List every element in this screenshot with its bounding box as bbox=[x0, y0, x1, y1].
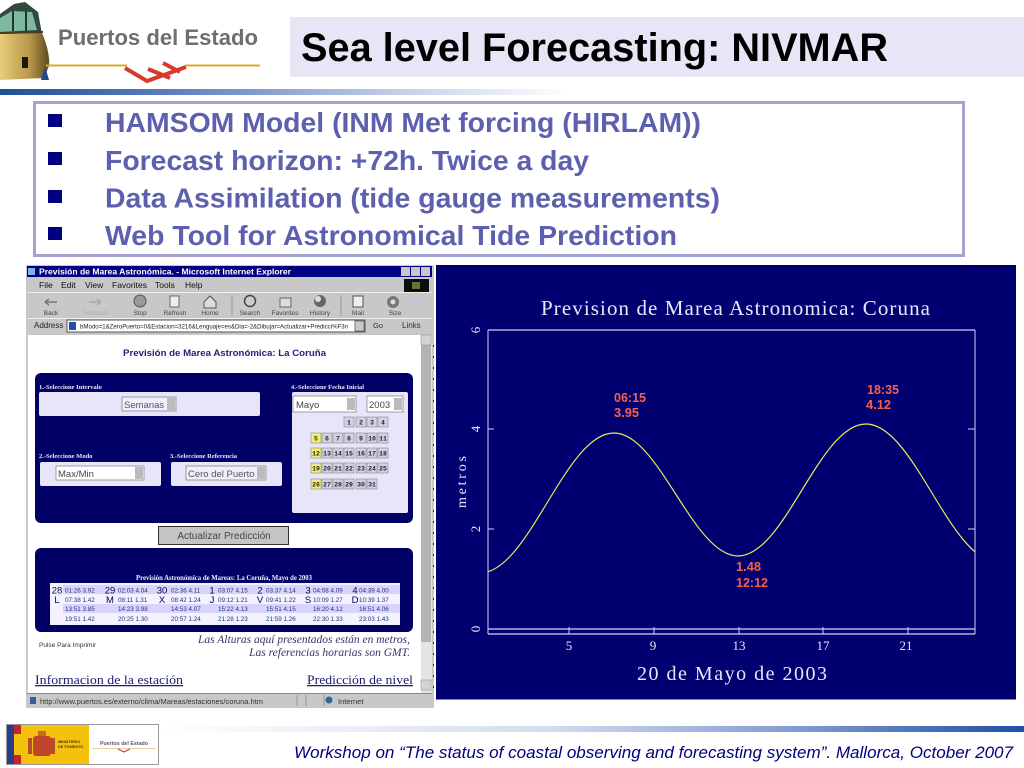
icon: coat of arms bbox=[28, 731, 55, 756]
page area bbox=[28, 335, 421, 693]
table body: 15:51 4.15 bbox=[266, 606, 296, 613]
step 4 calendar: 14 bbox=[334, 450, 342, 458]
menu bar: File bbox=[39, 280, 53, 290]
step 4 calendar: 16 bbox=[357, 450, 365, 458]
y axis labels: 4 bbox=[468, 425, 483, 432]
calendar cells bbox=[311, 417, 388, 489]
links: Informacion de la estación bbox=[35, 673, 184, 687]
icon: red zigzag bbox=[125, 63, 186, 81]
step 4 calendar: 31 bbox=[368, 482, 376, 488]
table body: 01:26 3.92 bbox=[65, 588, 95, 594]
annotation: low tide: 1.48 bbox=[736, 559, 761, 574]
step 4 calendar: Mayo bbox=[296, 400, 319, 411]
annotation: second high tide: 18:35 bbox=[867, 382, 899, 397]
table body: 21:59 1.26 bbox=[266, 616, 296, 623]
annotation: first high tide bbox=[614, 390, 646, 420]
table body: 2 bbox=[257, 586, 263, 596]
table body: 16:51 4.06 bbox=[359, 606, 389, 613]
small wordmark: Puertos del Estado bbox=[100, 741, 149, 747]
form panel bbox=[35, 373, 413, 523]
links bbox=[35, 673, 414, 687]
header gradient rule bbox=[0, 89, 570, 95]
table body: S bbox=[305, 595, 311, 606]
table body: 20:57 1.24 bbox=[171, 616, 201, 623]
title: Sea level Forecasting: NIVMAR bbox=[301, 26, 888, 70]
step 4 calendar: 29 bbox=[345, 482, 353, 488]
bullet 3: Data Assimilation (tide gauge measurements) bbox=[105, 182, 720, 214]
y axis labels: 6 bbox=[468, 326, 483, 333]
toolbar: Mail bbox=[352, 310, 365, 317]
panel: browser screenshot bbox=[26, 265, 434, 708]
table body: 08:11 1.31 bbox=[118, 597, 148, 604]
step 4 calendar: 28 bbox=[334, 482, 342, 488]
step 4 calendar: 23 bbox=[357, 466, 365, 472]
footer gradient rule bbox=[160, 726, 1024, 732]
logo rule bbox=[46, 64, 260, 66]
step 1 bbox=[39, 384, 260, 416]
table body: 3 bbox=[305, 586, 311, 596]
tide curve bbox=[480, 424, 998, 573]
table body: V bbox=[257, 595, 264, 606]
step 4 calendar: 4.-Seleccione Fecha Inicial bbox=[291, 384, 364, 391]
toolbar: Forward bbox=[83, 310, 107, 317]
table body: 30 bbox=[157, 586, 167, 596]
table heading: Previsión Astronómica de Mareas: La Coruña, Mayo de 2003 bbox=[136, 574, 312, 582]
x axis labels: 9 bbox=[650, 638, 656, 653]
toolbar icons bbox=[45, 295, 399, 308]
table body: 20:25 1.30 bbox=[118, 616, 148, 623]
table body: 09:12 1.21 bbox=[218, 597, 248, 604]
icon: lighthouse bbox=[0, 2, 49, 80]
small red mark bbox=[118, 749, 130, 752]
step 3: 3.-Seleccione Referencia bbox=[170, 453, 238, 460]
browser title bar bbox=[27, 266, 432, 277]
step 4 calendar: 3 bbox=[370, 420, 374, 426]
step 4 calendar bbox=[291, 384, 408, 513]
status bar: http://www.puertos.es/externo/clima/Mareas/estaciones/coruna.htm bbox=[40, 697, 263, 706]
table body: 23:03 1.43 bbox=[359, 616, 389, 623]
table body: 1 bbox=[209, 586, 215, 596]
annotation: first high tide: 3.95 bbox=[614, 405, 639, 420]
ministry label: MINISTERIO bbox=[58, 740, 80, 744]
annotation: second high tide bbox=[866, 382, 899, 412]
table body: 07:38 1.42 bbox=[65, 597, 95, 604]
bullet 2: Forecast horizon: +72h. Twice a day bbox=[105, 144, 589, 176]
step 2 bbox=[39, 453, 161, 486]
step 4 calendar: 2003 bbox=[369, 400, 390, 411]
x axis labels: 13 bbox=[732, 638, 746, 653]
table body: 08:42 1.24 bbox=[171, 597, 201, 604]
table body: 09:41 1.22 bbox=[266, 597, 296, 604]
step 4 calendar: 4 bbox=[381, 420, 385, 426]
toolbar: Refresh bbox=[164, 310, 187, 317]
step 1: Semanas bbox=[124, 400, 164, 411]
menu bar: View bbox=[85, 280, 104, 290]
annotation: second high tide: 4.12 bbox=[866, 397, 891, 412]
table body: 03:07 4.15 bbox=[218, 588, 248, 594]
table body: 29 bbox=[105, 586, 115, 596]
table body: 14:53 4.07 bbox=[171, 606, 201, 613]
menu bar: Tools bbox=[155, 280, 175, 290]
step 2: 2.-Seleccione Modo bbox=[39, 453, 92, 460]
step 4 calendar: 11 bbox=[379, 436, 387, 442]
x axis labels: 5 bbox=[566, 638, 572, 653]
y axis labels: 0 bbox=[468, 626, 483, 632]
annotation: low tide bbox=[736, 559, 768, 590]
step 4 calendar: 1 bbox=[347, 420, 351, 426]
address bar: Links bbox=[402, 321, 421, 330]
footer caption: Workshop on “The status of coastal observing and forecasting system”. Mallorca, October 2007 bbox=[294, 743, 1014, 762]
table body: 03:37 4.14 bbox=[266, 588, 296, 594]
logo wordmark: Puertos del Estado bbox=[58, 25, 258, 50]
step 4 calendar: 15 bbox=[345, 450, 353, 458]
step 4 calendar: 30 bbox=[357, 482, 365, 488]
table body: 04:39 4.00 bbox=[359, 588, 389, 594]
print label: Pulse Para Imprimir bbox=[39, 642, 97, 649]
table body bbox=[50, 583, 400, 625]
italic note: Las Alturas aquí presentados están en metros, bbox=[197, 634, 410, 646]
table body: 16:20 4.12 bbox=[313, 606, 343, 613]
table body: M bbox=[106, 595, 114, 606]
small rule bbox=[92, 748, 156, 750]
step 4 calendar: 10 bbox=[368, 436, 376, 442]
step 4 calendar: 21 bbox=[334, 466, 342, 472]
address bar bbox=[34, 320, 421, 332]
page heading: Previsión de Marea Astronómica: La Coruña bbox=[123, 348, 327, 358]
step 4 calendar: 20 bbox=[323, 466, 331, 472]
bullet 4: Web Tool for Astronomical Tide Prediction bbox=[105, 219, 677, 251]
step 4 calendar: 24 bbox=[368, 466, 376, 472]
x axis title: 20 de Mayo de 2003 bbox=[637, 663, 827, 685]
table body: 4 bbox=[352, 586, 358, 596]
status bar bbox=[27, 694, 432, 706]
x axis labels: 21 bbox=[900, 638, 912, 653]
tide table panel bbox=[35, 548, 413, 632]
address bar: bModo=1&ZeroPuerto=0&Estacion=3216&Lenguaje=es&Dia=-2&Dibujar=Actualizar+Predicci%F3n bbox=[80, 324, 348, 330]
step 3: Cero del Puerto bbox=[188, 469, 255, 480]
toolbar: Size bbox=[389, 310, 402, 317]
italic note: Las referencias horarias son GMT. bbox=[248, 647, 410, 659]
address bar: Address bbox=[34, 321, 63, 330]
table body: 22:30 1.33 bbox=[313, 616, 343, 623]
toolbar: Favorites bbox=[272, 310, 299, 317]
step 1: 1.-Seleccione Intervalo bbox=[39, 384, 102, 391]
y axis title: metros bbox=[455, 456, 470, 508]
toolbar: Home bbox=[201, 310, 219, 317]
menu bar bbox=[39, 279, 429, 292]
status bar: Internet bbox=[338, 697, 364, 706]
annotation: first high tide: 06:15 bbox=[614, 390, 646, 405]
toolbar: Stop bbox=[133, 310, 147, 317]
toolbar: History bbox=[310, 310, 331, 317]
table body: 10:39 1.37 bbox=[359, 597, 389, 604]
step 4 calendar: 25 bbox=[379, 466, 387, 472]
table body: 02:03 4.04 bbox=[118, 588, 148, 594]
menu bar: Help bbox=[185, 280, 203, 290]
table body: L bbox=[54, 595, 60, 606]
ministry label bbox=[58, 740, 83, 749]
title band bbox=[290, 17, 1024, 77]
table body: 19:51 1.42 bbox=[65, 616, 95, 623]
annotation: low tide: 12:12 bbox=[736, 575, 768, 590]
step 4 calendar: 9 bbox=[359, 436, 363, 442]
table body: 28 bbox=[52, 586, 62, 596]
table body: 10:09 1.27 bbox=[313, 597, 343, 604]
table body: 02:36 4.11 bbox=[171, 588, 201, 594]
browser title bar: Previsión de Marea Astronómica. - Microsoft Internet Explorer bbox=[39, 268, 291, 276]
table body: 15:22 4.13 bbox=[218, 606, 248, 613]
scrollbar bbox=[421, 335, 432, 693]
table body: 04:08 4.09 bbox=[313, 588, 343, 594]
x axis labels: 17 bbox=[816, 638, 830, 653]
y axis labels: 2 bbox=[468, 526, 483, 532]
step 4 calendar: 2 bbox=[359, 420, 363, 426]
italic note bbox=[197, 634, 410, 659]
step 4 calendar: 18 bbox=[379, 450, 387, 458]
table body: J bbox=[210, 595, 215, 606]
step 3 bbox=[170, 453, 282, 486]
toolbar bbox=[27, 292, 432, 318]
address bar: Go bbox=[373, 321, 383, 330]
step 4 calendar: 12 bbox=[312, 450, 320, 458]
step 4 calendar: 6 bbox=[325, 436, 329, 442]
links: Predicción de nivel bbox=[307, 673, 414, 687]
x axis labels bbox=[566, 638, 912, 653]
panel: bullet list bbox=[34, 102, 964, 256]
step 4 calendar: 7 bbox=[336, 436, 340, 442]
bullet 1: HAMSOM Model (INM Met forcing (HIRLAM)) bbox=[105, 106, 701, 138]
footer logo: ministerio and puertos bbox=[6, 724, 158, 764]
step 4 calendar: 22 bbox=[345, 466, 353, 472]
table body: 14:23 3.98 bbox=[118, 606, 148, 613]
ministry label: DE FOMENTO bbox=[58, 745, 83, 749]
step 4 calendar: 26 bbox=[312, 482, 320, 488]
toolbar: Back bbox=[44, 310, 59, 317]
step 4 calendar: 19 bbox=[312, 466, 320, 472]
step 4 calendar: 5 bbox=[314, 436, 318, 442]
logo: Puertos del Estado bbox=[0, 2, 260, 81]
update button bbox=[158, 526, 288, 544]
step 4 calendar: 8 bbox=[347, 436, 351, 442]
step 4 calendar: 17 bbox=[368, 450, 376, 458]
update button: Actualizar Predicción bbox=[177, 531, 271, 542]
plot frame and axes bbox=[488, 330, 975, 634]
toolbar: Search bbox=[240, 310, 261, 317]
y axis labels bbox=[468, 326, 483, 632]
step 4 calendar: 13 bbox=[323, 450, 331, 458]
table body: 13:51 3.85 bbox=[65, 606, 95, 613]
menu bar: Favorites bbox=[112, 280, 147, 290]
step 2: Max/Min bbox=[58, 469, 94, 480]
table body: D bbox=[352, 595, 359, 606]
menu bar: Edit bbox=[61, 280, 76, 290]
step 4 calendar: 27 bbox=[323, 482, 331, 488]
panel: tide chart bbox=[436, 265, 1016, 700]
chart title: Prevision de Marea Astronomica: Coruna bbox=[541, 296, 931, 320]
table body: X bbox=[159, 595, 166, 606]
table body: 21:28 1.23 bbox=[218, 616, 248, 623]
